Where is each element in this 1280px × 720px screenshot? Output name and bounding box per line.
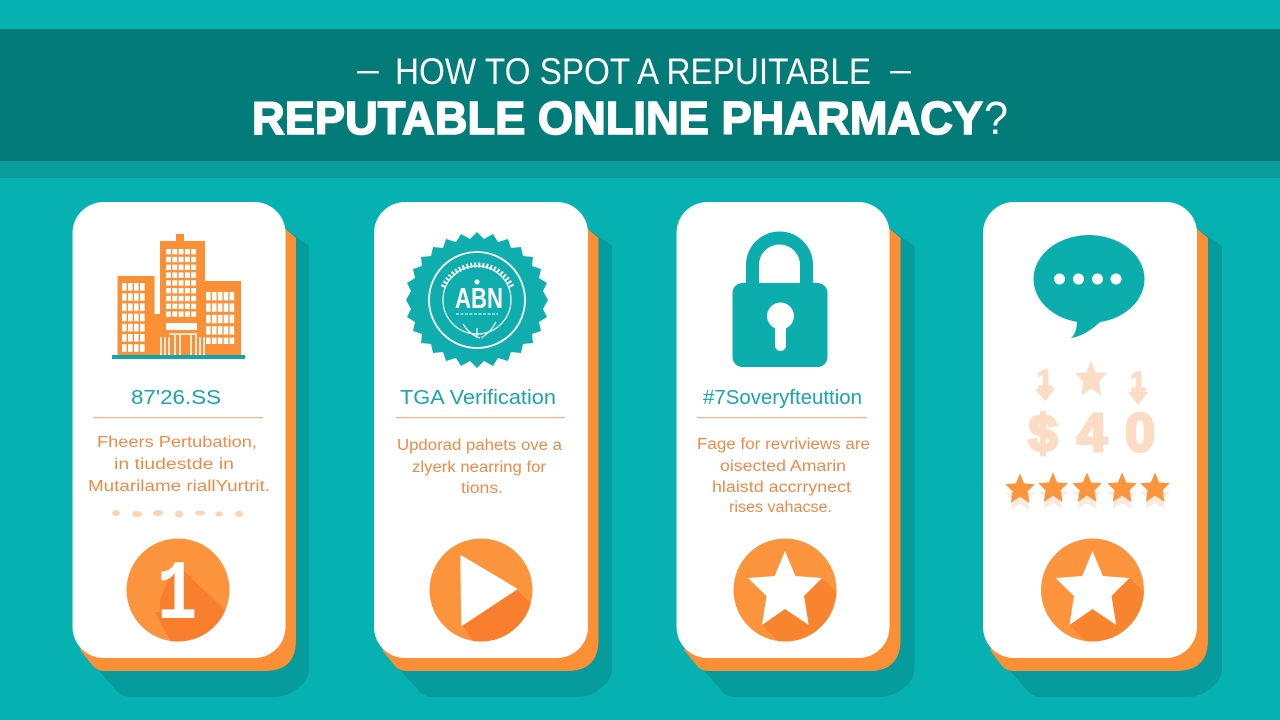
body text 1 <box>88 434 270 495</box>
faded rating figures: 1 <box>1037 364 1053 395</box>
body text 3: oisected Amarin <box>720 458 846 475</box>
faded dots <box>112 510 243 518</box>
card 4 layers <box>983 202 1222 697</box>
faded rating figures: $ <box>1029 405 1058 463</box>
title <box>252 51 1008 144</box>
body text 2: tions. <box>461 480 503 497</box>
icon: ABN seal <box>406 232 548 368</box>
icon: number badge 1: 1 <box>157 548 197 643</box>
icon: padlock <box>732 238 828 367</box>
five star rating <box>1005 472 1170 503</box>
icon: building <box>112 234 245 359</box>
star reflections <box>1005 482 1170 510</box>
card 1 layers <box>72 202 309 697</box>
panel 3: security <box>676 202 914 697</box>
body text 1: in tiudestde in <box>114 456 234 473</box>
card 2 layers <box>374 202 612 697</box>
title: REPUTABLE ONLINE PHARMACY <box>252 92 983 144</box>
icon: star badge 4 <box>1041 538 1144 642</box>
body text 1: Fheers Pertubation, <box>97 434 257 451</box>
icon: play badge <box>430 538 532 642</box>
title: ? <box>984 92 1008 144</box>
faded rating figures: 0 <box>1125 403 1155 463</box>
faded rating figures <box>1029 360 1155 463</box>
title: HOW TO SPOT A REPUITABLE <box>395 51 871 92</box>
divider 2 <box>396 417 565 418</box>
faded rating figures: 4 <box>1077 403 1107 463</box>
divider 3 <box>697 417 867 418</box>
heading 1: 87'26.SS <box>131 387 221 409</box>
heading 2: TGA Verification <box>400 387 556 409</box>
icon: number badge 1 <box>126 538 230 642</box>
panel 2: verification <box>374 202 612 697</box>
icon: star badge 3 <box>734 538 836 642</box>
panel 4: reviews <box>983 202 1222 697</box>
body text 3: rises vahacse. <box>729 499 832 516</box>
body text 3: Fage for revriviews are <box>697 436 870 453</box>
faded rating figures: 1 <box>1130 366 1146 397</box>
body text 2 <box>397 437 562 497</box>
body text 3: hlaistd accrrynect <box>712 479 852 496</box>
card 3 layers <box>676 202 914 697</box>
icon: ABN seal: ABN <box>455 283 503 315</box>
body text 2: Updorad pahets ove a <box>397 437 562 454</box>
body text 3 <box>697 436 870 516</box>
icon: speech bubble <box>1034 235 1144 338</box>
body text 1: Mutarilame riallYurtrit. <box>88 478 270 495</box>
panel 1: building <box>72 202 309 697</box>
body text 2: zlyerk nearring for <box>412 459 546 476</box>
heading 3: #7Soveryfteuttion <box>703 387 862 409</box>
header band <box>0 29 1280 178</box>
divider 1 <box>93 417 263 418</box>
